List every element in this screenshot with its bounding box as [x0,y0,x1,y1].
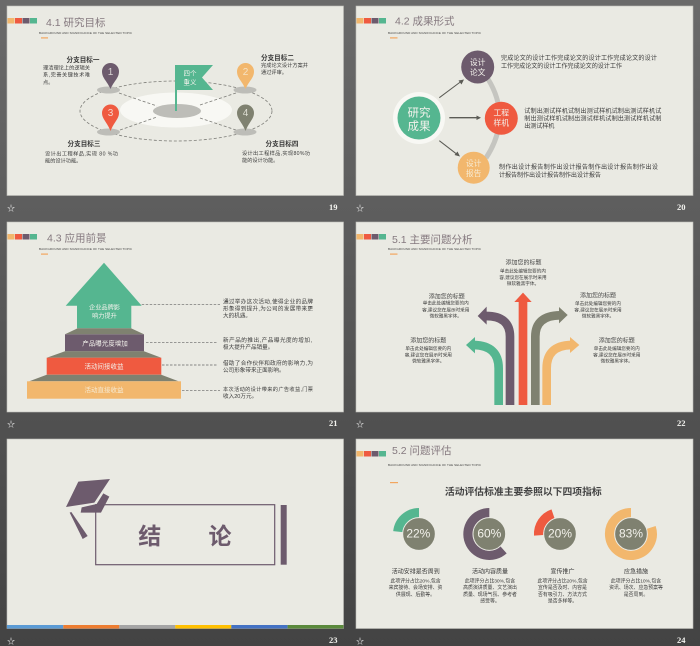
subtitle: BACKGROUND AND SIGNIFICANCE OF THE SELECTED TOPIC [39,247,133,251]
text: upper left [422,293,470,320]
text: lower right: 微软雅黑字体。 [601,358,633,364]
donut 60% [468,513,506,555]
text: tier 2 [223,336,312,351]
goal 2 text [261,53,308,76]
text: item 4 [609,568,663,598]
text: item 4: 此项评分占比10%,包含 [611,578,661,584]
title: 5.2 问题评估 [392,444,452,457]
text: upper right: 单击此处编辑您要的内 [575,300,621,307]
text: lower right: 添加您的标题 [599,337,635,345]
panel: slide 20 outcome forms [356,6,693,213]
text: tier 1: 大的机遇。 [223,312,251,320]
pin 4: 4 [243,108,249,119]
pin 2: 2 [243,67,249,78]
graduation cap icon [66,479,110,539]
goal 3 text [45,139,118,164]
text: item 3: 此项评分占比20%,包含 [537,578,588,584]
accent line [390,482,398,483]
text: tier 4: 本次活动的设计带来的广告收益,门票 [223,385,313,393]
node: design report: 设计 [466,158,482,168]
text: tier 3: 公司形象带来正面影响。 [223,366,285,374]
text: upper right: 添加您的标题 [580,292,616,300]
flag [175,65,213,111]
text: item 2 [463,568,517,604]
text: tier 4 [223,385,313,400]
page number: 23 [329,635,338,645]
text: upper right: 微软雅黑字体。 [582,312,614,320]
text: item 2: 质量、现场气氛、参考者 [463,591,517,598]
subtitle: BACKGROUND AND SIGNIFICANCE OF THE SELECTED TOPIC [388,247,482,251]
heading left character: 结 [138,523,161,549]
node: design report: 报告 [466,168,482,178]
text: tier 2: 极大提升产品销量。 [223,343,273,351]
panel: slide 19 research goals [7,6,344,213]
title: 4.1 研究目标 [46,16,106,29]
node: prototype: 工程 [494,108,509,118]
side bar [281,505,287,565]
text: top: 容,建议您在展示时采用 [499,274,547,281]
tier 2 [65,328,144,351]
tier 1 arrow: 企业品牌影 [89,304,120,312]
text: item 2: 高质演讲质量、文艺演出 [463,584,517,591]
accent line [390,37,398,38]
text: upper left: 单击此处编辑您要的内 [423,300,469,306]
text: upper right [574,292,622,320]
text: prototype: 制出测试样机试制出测试样机试制出测试样机试制 [524,114,661,122]
goal 1 text: 理清理论上的逻辑关 [43,63,90,71]
page number: 22 [677,418,686,428]
text: item 2: 活动内容质量 [472,568,508,576]
text: prototype: 试制出测试样机试制出测试样机试制出测试样机试 [524,107,661,115]
text: lower left: 添加您的标题 [410,337,446,345]
text: lower right: 容,建议您在展示时采用 [593,352,641,358]
page number: 20 [677,202,686,212]
text: design paper [501,54,657,70]
text: tier 1: 形象得到提升,为公司的发展带来更 [223,304,313,312]
text: design report: 制作出设计报告制作出设计报告制作出设计报告制作出设 [499,163,658,171]
title: 5.1 主要问题分析 [392,233,473,246]
text: item 4: 资讯、场次、应急预案等 [609,584,663,591]
pin 3: 3 [108,108,114,119]
subtitle: BACKGROUND AND SIGNIFICANCE OF THE SELECTED TOPIC [39,31,133,35]
title: 4.3 应用前景 [47,232,107,244]
donut 22% [398,513,435,550]
title: 4.2 成果形式 [395,14,455,28]
text: lower left: 容,建议您在展示时采用 [405,352,452,358]
colour swatches [8,234,37,240]
goal 3 text: 设计出工程样品,实现 80 %功 [45,150,118,158]
goal 1 text: 点。 [43,79,53,86]
text: design report: 计报告制作出设计报告制作出设计报告 [499,171,601,179]
title frame [96,505,275,565]
tier 1 arrow: 响力提升 [92,312,117,320]
text: item 1: 供展现、后勤等。 [396,591,435,598]
tier 1 arrow [66,263,142,328]
tier 3 [47,351,161,375]
flag: 四个 [184,70,197,78]
donut 20%: 20% [548,527,572,541]
donut 83%: 83% [619,527,643,541]
node: design paper [461,50,494,84]
accent line [390,254,398,255]
donut 22%: 22% [406,527,431,541]
text: item 4: 是否周到。 [624,591,648,598]
colour swatches [356,18,386,24]
text: prototype [524,107,661,130]
text: upper right: 容,建议您在展示时采用 [574,306,622,314]
central circle: 成果 [408,120,431,133]
text: upper left: 微软雅黑字体。 [430,312,462,320]
donut 83% [610,513,652,555]
text: item 2: 感受等。 [480,598,500,604]
node: prototype: 样机 [494,118,509,128]
node: design report [458,152,490,184]
star icon: ☆ [7,204,15,213]
text: item 1 [389,568,443,598]
text: tier 1 [223,298,313,320]
text: lower right [593,337,641,364]
page number: 19 [329,202,338,212]
colour swatches [8,18,37,24]
pin 4 [237,104,254,131]
text: top: 添加您的标题 [505,259,542,267]
text: lower left: 单击此处编辑您要的内 [405,345,452,352]
text: lower right: 单击此处编辑您要的内 [594,345,640,352]
text: item 2: 此项评分占比30%,包含 [465,578,515,584]
connecting arc [486,79,500,158]
colour swatches [356,234,386,240]
node: design paper: 设计 [470,57,486,67]
text: item 1: 活动安排是否周到 [392,568,440,576]
text: tier 1: 通过举办这次活动,使得企业的品牌 [223,298,313,306]
goal 2 text: 分支目标二 [261,53,294,62]
text: top [499,259,547,287]
goal 2 text: 完成论文设计方案并 [261,61,308,69]
goal 1 text: 分支目标一 [67,55,100,64]
target diagram [80,81,272,141]
donut 60%: 60% [477,527,502,541]
goal 1 text: 系,完善关键技术难 [43,70,90,78]
donut 20% [539,514,576,550]
text: item 3: 否有吸引力、方法方式 [538,591,587,598]
pin 1 [102,63,119,89]
star icon: ☆ [7,637,15,646]
pin 3 [102,104,119,131]
panel: slide 21 application outlook [7,222,344,429]
panel: slide 23 conclusion [7,439,344,646]
text: tier 2: 新产品的推出,产品曝光度的增加, [223,336,312,344]
goal 4 text [242,139,310,164]
text: item 1: 来宾接待、会场安排、资 [389,584,443,591]
text: design paper: 工作完成论文的设计工作完成论文的设计工作 [501,62,622,70]
text: prototype: 出测试样机 [524,122,554,130]
text: tier 4: 收入20万元。 [223,392,257,400]
text: item 3: 宣传推广 [550,568,575,576]
colour strip [7,625,344,628]
dashed leader lines [142,305,220,391]
tier 4 [27,375,181,399]
accent line [41,254,48,255]
colour swatches [356,451,386,456]
text: design paper: 完成论文的设计工作完成论文的设计工作完成论文的设计 [501,54,657,62]
heading right character: 论 [208,523,232,549]
tier 3: 活动间接收益 [84,362,124,370]
page number: 21 [329,418,338,428]
text: top: 微软雅黑字体。 [507,280,539,287]
text: item 3: 是否多样等。 [548,598,577,604]
node: design paper: 论文 [470,67,486,77]
five arrows [466,293,579,405]
text: item 3: 宣传是否及时、内容是 [538,584,587,591]
text: top: 单击此处编辑您要的内 [500,268,546,274]
pin 1: 1 [108,67,114,78]
text: upper left: 容,建议您在展示时采用 [422,306,470,314]
accent line [41,37,48,38]
subtitle: BACKGROUND AND SIGNIFICANCE OF THE SELECTED TOPIC [388,31,482,35]
text: item 4: 应急措施 [624,568,648,576]
text: design report [499,163,658,179]
goal 1 text [43,55,100,86]
node: prototype [485,102,518,135]
star icon: ☆ [356,204,364,213]
page number: 24 [677,635,686,645]
text: tier 3 [223,359,313,374]
goal 3 text: 分支目标三 [68,139,101,148]
star icon: ☆ [356,420,364,429]
goal 4 text: 设计出工程样品,实现80%功 [242,149,310,157]
tier 2: 产品曝光度增加 [82,338,128,347]
pin 2 [237,63,254,89]
star icon: ☆ [356,637,364,646]
text: item 3 [537,568,588,604]
heading: 活动评估标准主要参照以下四项指标 [445,485,602,498]
arrows [439,80,481,156]
goal 4 text: 能的设计功能。 [242,156,278,164]
goal 4 text: 分支目标四 [266,139,299,148]
star icon: ☆ [7,420,15,429]
subtitle: BACKGROUND AND SIGNIFICANCE OF THE SELECTED TOPIC [388,463,482,467]
tier 4: 活动直接收益 [84,385,124,394]
goal 3 text: 能的设计功能。 [45,156,81,164]
text: lower left: 微软雅黑字体。 [412,358,444,364]
central circle: 研究 [408,106,431,120]
text: item 1: 此项评分占比20%,包含 [390,578,441,584]
goal 2 text: 通过评审。 [261,68,287,76]
panel: slide 22 problem analysis [356,222,693,429]
text: tier 3: 借助了合作伙伴和政府的影响力,为 [223,359,313,367]
text: lower left [405,337,452,364]
central circle [393,92,445,144]
panel: slide 24 problem evaluation [356,439,693,646]
text: upper left: 添加您的标题 [429,293,465,301]
flag: 重义 [184,78,197,86]
